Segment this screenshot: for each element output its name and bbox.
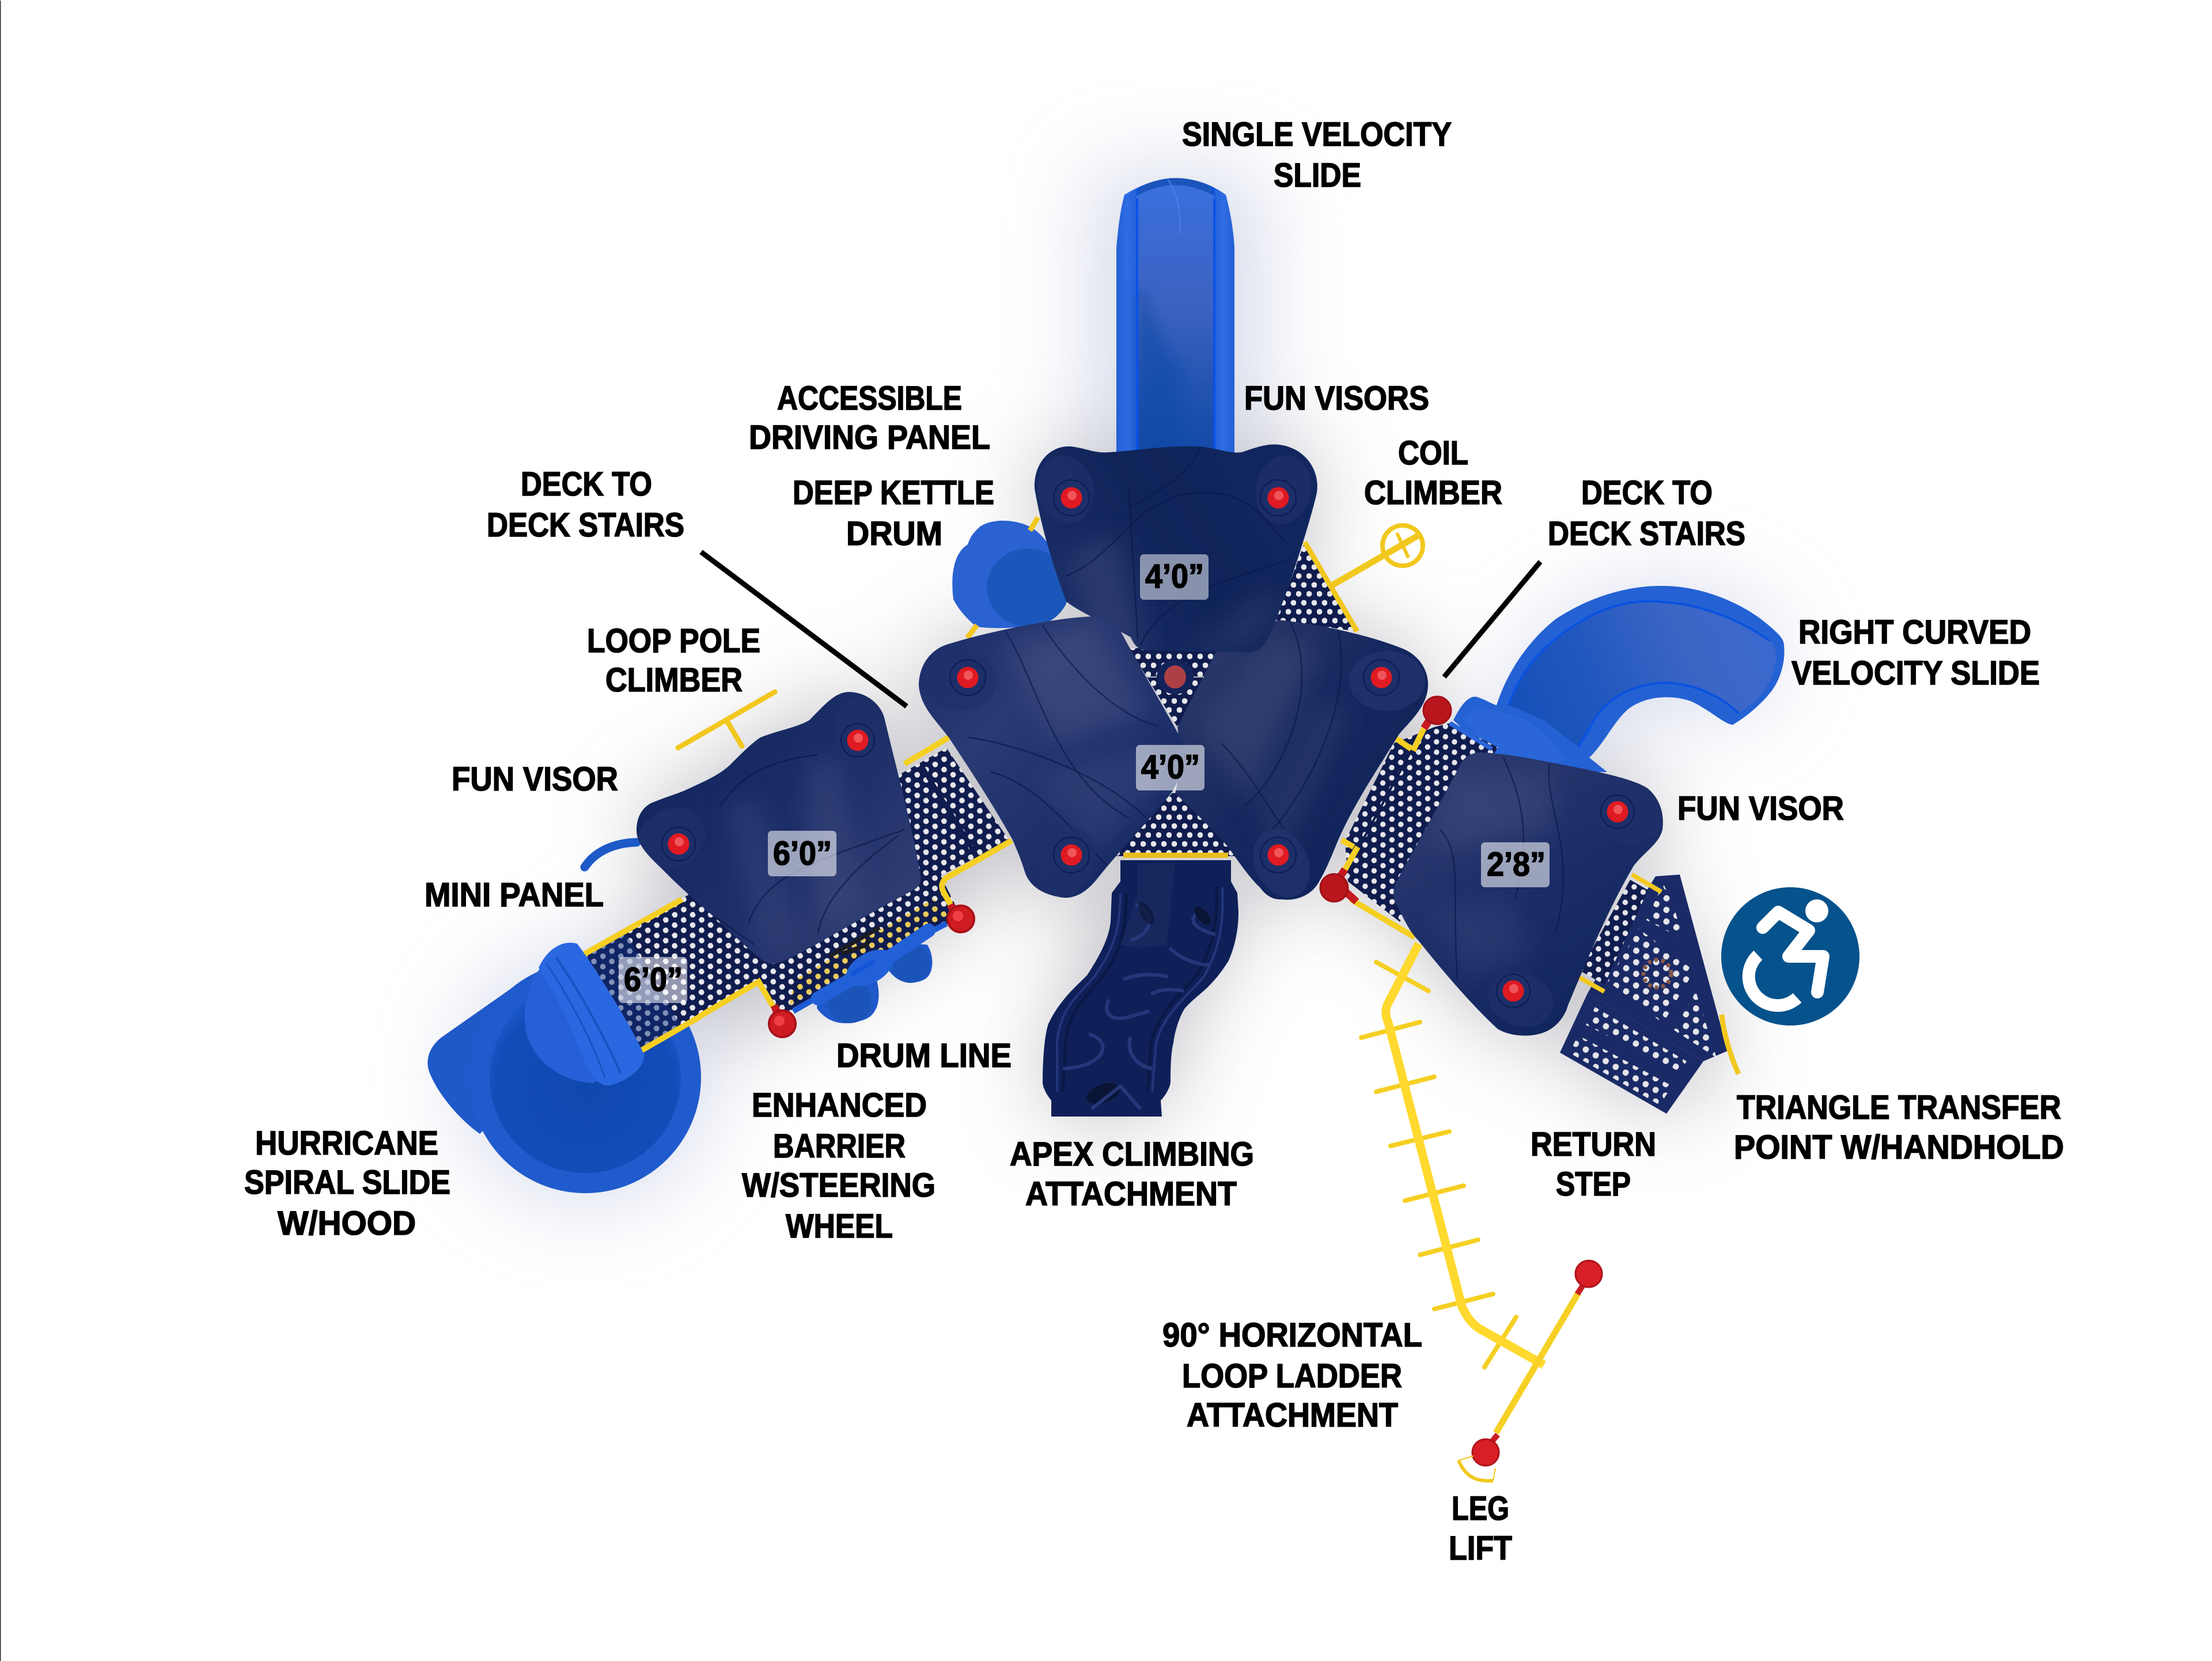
left visor bbox=[919, 616, 1187, 907]
label: accessible driving panel bbox=[749, 380, 990, 456]
left border line bbox=[0, 1, 1, 1661]
label: enhanced barrier with steering wheel: W/STEERING bbox=[742, 1167, 935, 1204]
top visor bbox=[1032, 444, 1317, 652]
label: deep kettle drum: DEEP KETTLE bbox=[793, 474, 994, 512]
label: coil climber: COIL bbox=[1398, 434, 1468, 472]
right mesh deck bbox=[1342, 723, 1498, 937]
label: hurricane spiral slide with hood: SPIRAL SLIDE bbox=[244, 1164, 450, 1201]
label: deck to deck stairs left bbox=[487, 466, 684, 544]
label: loop pole climber: CLIMBER bbox=[605, 661, 743, 699]
label: mini panel: MINI PANEL bbox=[425, 876, 604, 914]
label: triangle transfer point with handhold: TRIANGLE TRANSFER bbox=[1737, 1089, 2061, 1126]
label: deck to deck stairs right: DECK TO bbox=[1581, 474, 1713, 512]
center mesh triangles bbox=[1109, 648, 1241, 856]
label: deck to deck stairs right: DECK STAIRS bbox=[1548, 515, 1745, 553]
height badge: 4'0 upper: 4’0” bbox=[1145, 558, 1204, 595]
height badge: 2'8: 2’8” bbox=[1487, 846, 1546, 883]
label: fun visors: FUN VISORS bbox=[1244, 380, 1429, 417]
label: 90 degree horizontal loop ladder attachment bbox=[1162, 1316, 1422, 1434]
label: single velocity slide: SINGLE VELOCITY bbox=[1182, 116, 1452, 153]
label: triangle transfer point with handhold: POINT W/HANDHOLD bbox=[1734, 1129, 2064, 1166]
return step bbox=[1560, 993, 1703, 1114]
label: return step: STEP bbox=[1556, 1166, 1631, 1203]
right curved velocity slide bbox=[1453, 586, 1785, 772]
label: leg lift: LIFT bbox=[1449, 1530, 1512, 1567]
leader line left bbox=[701, 552, 907, 706]
leader line right bbox=[1444, 562, 1540, 677]
hurricane spiral slide with hood bbox=[427, 922, 701, 1193]
6 foot visor bbox=[626, 692, 921, 963]
height badge: 4'0 lower: 4’0” bbox=[1141, 748, 1200, 786]
soft ground shadow bbox=[461, 173, 1784, 1201]
label: coil climber: CLIMBER bbox=[1364, 474, 1502, 512]
label: enhanced barrier with steering wheel: ENHANCED bbox=[752, 1087, 927, 1124]
left deck to deck stairs and long mesh deck bbox=[581, 737, 1012, 1054]
mini panel bbox=[585, 842, 637, 867]
label: deep kettle drum: DRUM bbox=[846, 515, 942, 553]
label: accessible driving panel: DRIVING PANEL bbox=[749, 419, 990, 456]
label: enhanced barrier with steering wheel: WHEEL bbox=[786, 1208, 893, 1245]
label: apex climbing attachment: APEX CLIMBING bbox=[1010, 1136, 1254, 1173]
label: 90 degree horizontal loop ladder attachment: LOOP LADDER bbox=[1182, 1357, 1402, 1395]
center post cap bbox=[1147, 660, 1204, 694]
label: deep kettle drum bbox=[793, 474, 994, 553]
label: enhanced barrier with steering wheel bbox=[742, 1087, 935, 1245]
label: deck to deck stairs left: DECK TO bbox=[521, 466, 652, 503]
label: single velocity slide bbox=[1182, 116, 1452, 194]
label: fun visor right: FUN VISOR bbox=[1677, 790, 1844, 827]
triangle transfer point bbox=[1577, 875, 1728, 1061]
coil climber bbox=[1329, 525, 1423, 587]
apex climbing attachment bbox=[1043, 853, 1238, 1117]
label: drum line: DRUM LINE bbox=[836, 1037, 1012, 1074]
label: hurricane spiral slide with hood bbox=[244, 1125, 450, 1242]
label: loop pole climber: LOOP POLE bbox=[587, 622, 760, 660]
label: leg lift: LEG bbox=[1452, 1490, 1509, 1527]
label: single velocity slide: SLIDE bbox=[1274, 157, 1361, 194]
label: fun visor left: FUN VISOR bbox=[452, 760, 618, 798]
right visor bbox=[1175, 620, 1428, 907]
label: apex climbing attachment bbox=[1010, 1136, 1254, 1213]
label: 90 degree horizontal loop ladder attachment: ATTACHMENT bbox=[1187, 1397, 1398, 1434]
label: right curved velocity slide: VELOCITY SLIDE bbox=[1791, 654, 2040, 692]
label: apex climbing attachment: ATTACHMENT bbox=[1025, 1175, 1237, 1213]
label: accessible driving panel: ACCESSIBLE bbox=[777, 380, 962, 417]
label: enhanced barrier with steering wheel: BARRIER bbox=[773, 1127, 906, 1165]
leg lift bbox=[1459, 1261, 1602, 1481]
deep kettle drum bbox=[952, 521, 1070, 628]
visor bolts bbox=[662, 480, 1634, 1008]
label: leg lift bbox=[1449, 1490, 1512, 1567]
label: right curved velocity slide bbox=[1791, 614, 2040, 692]
label: loop pole climber bbox=[587, 622, 760, 699]
label: right curved velocity slide: RIGHT CURVED bbox=[1798, 614, 2031, 651]
drum line and enhanced barrier with steering wheel bbox=[793, 924, 946, 1023]
label: 90 degree horizontal loop ladder attachment: 90° HORIZONTAL bbox=[1162, 1316, 1422, 1354]
corner post caps bbox=[769, 697, 1451, 1037]
label: triangle transfer point with handhold bbox=[1734, 1089, 2064, 1166]
loop pole climber bbox=[678, 692, 775, 748]
2 foot 8 visor bbox=[1393, 752, 1669, 1036]
label: return step: RETURN bbox=[1531, 1126, 1656, 1163]
label: deck to deck stairs right bbox=[1548, 474, 1745, 553]
upper mesh deck and yellow rails bbox=[967, 517, 1357, 638]
label: deck to deck stairs left: DECK STAIRS bbox=[487, 506, 684, 544]
label: return step bbox=[1531, 1126, 1656, 1203]
label: hurricane spiral slide with hood: HURRICANE bbox=[255, 1125, 438, 1162]
90 degree horizontal loop ladder attachment bbox=[1361, 944, 1544, 1367]
height badge: 6'0 visor: 6’0” bbox=[773, 835, 832, 872]
single velocity slide bbox=[1116, 178, 1234, 461]
label: coil climber bbox=[1364, 434, 1502, 512]
height badge: 6'0 deck: 6’0” bbox=[624, 961, 683, 998]
label: hurricane spiral slide with hood: W/HOOD bbox=[278, 1205, 416, 1242]
accessibility icon bbox=[1721, 887, 1859, 1026]
handhold bbox=[1722, 1015, 1738, 1074]
